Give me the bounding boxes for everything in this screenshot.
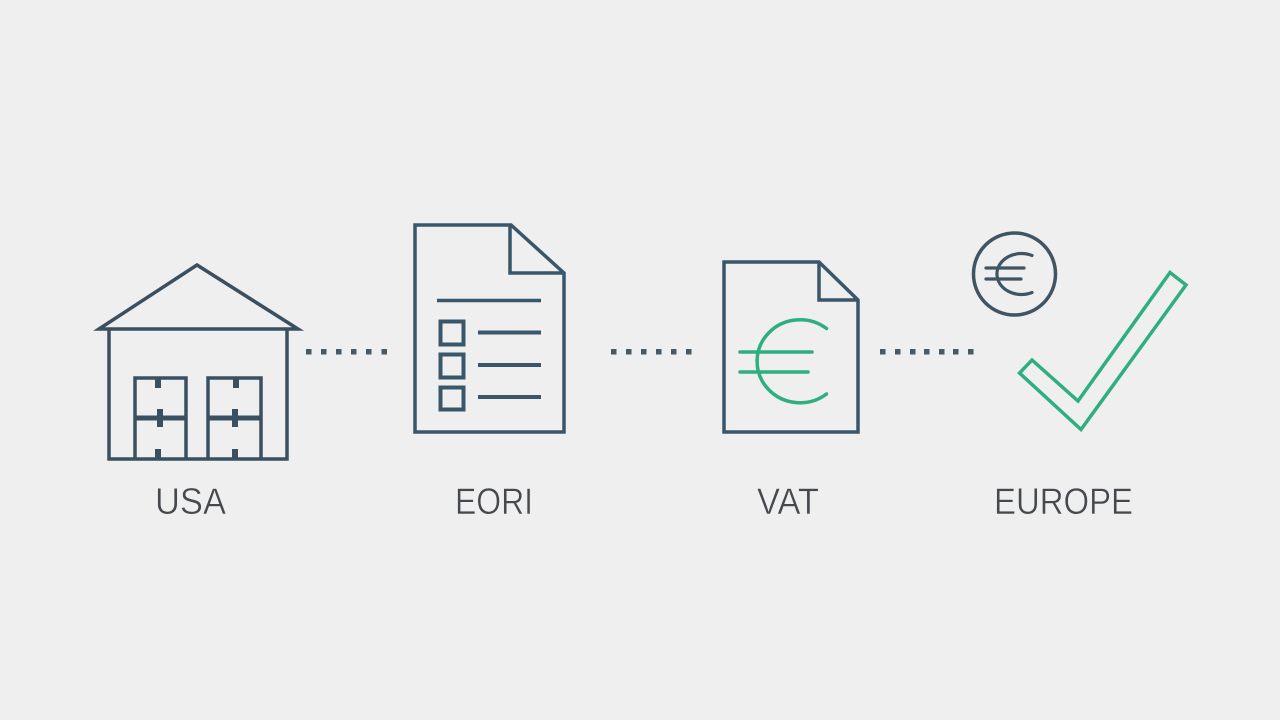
folded corner (510, 225, 564, 273)
label: EUROPE: EUROPE (994, 481, 1133, 522)
warehouse roof (99, 265, 298, 329)
icon: EORI document (415, 225, 564, 432)
dotted connector: USA to EORI (306, 349, 387, 354)
icon: green check mark (1020, 272, 1186, 430)
icon: euro coin (974, 233, 1056, 315)
euro symbol, green (740, 320, 826, 403)
left crates (135, 378, 186, 459)
icon: VAT document (724, 262, 858, 432)
warehouse walls (109, 329, 287, 459)
icon: warehouse (99, 265, 298, 459)
label: USA: USA (155, 481, 226, 522)
coin circle (974, 233, 1056, 315)
label: EORI: EORI (455, 481, 533, 522)
document outline (724, 262, 858, 432)
document outline (415, 225, 564, 432)
list lines (478, 332, 541, 397)
label: VAT: VAT (757, 481, 819, 522)
dotted connector: EORI to VAT (611, 349, 692, 354)
checkboxes (440, 322, 464, 410)
coin euro symbol (986, 254, 1032, 294)
dotted connector: VAT to Europe (880, 349, 974, 354)
heading line (437, 299, 541, 302)
right crates (208, 378, 261, 459)
